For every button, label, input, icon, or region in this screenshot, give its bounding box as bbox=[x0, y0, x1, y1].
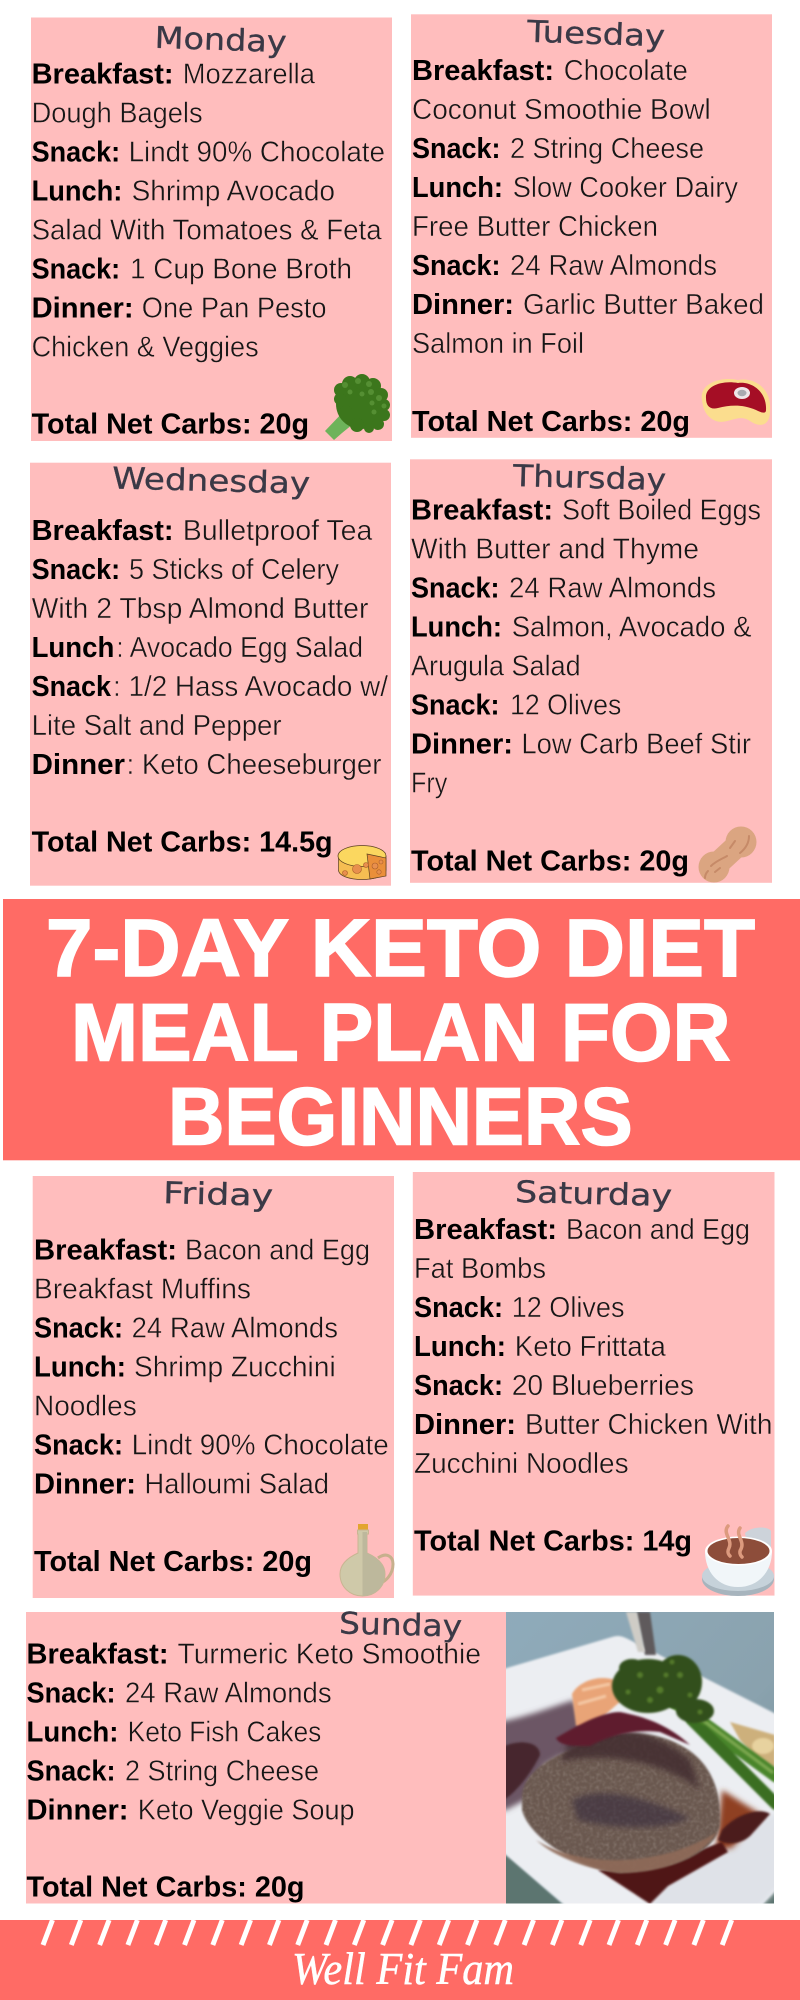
meals: Monday: Snack: bbox=[32, 253, 120, 285]
meals: Tuesday: Coconut Smoothie Bowl bbox=[412, 94, 711, 126]
meals: Thursday: Lunch: bbox=[411, 611, 502, 643]
meals: Tuesday: 2 String Cheese bbox=[510, 133, 704, 165]
meals: Tuesday: Lunch: bbox=[412, 172, 503, 204]
meals: Sunday: Keto Veggie Soup bbox=[138, 1794, 355, 1826]
meals: Monday: Lunch: bbox=[32, 175, 122, 207]
meals: Wednesday: Breakfast: bbox=[32, 515, 174, 547]
meals: Thursday: Soft Boiled Eggs bbox=[562, 494, 761, 526]
meals: Monday bbox=[32, 58, 385, 363]
right sauce bbox=[716, 1790, 762, 1850]
meals: Monday: 1 Cup Bone Broth bbox=[130, 253, 352, 285]
panel: Thursday bbox=[410, 459, 772, 883]
total net carbs: Wednesday: Total Net Carbs: 14.5g bbox=[32, 827, 333, 859]
meals: Friday: Lunch: bbox=[34, 1352, 126, 1384]
meals: Saturday: Butter Chicken With bbox=[525, 1409, 772, 1441]
meals: Wednesday: 5 Sticks of Celery bbox=[129, 554, 339, 586]
red onion bbox=[556, 1712, 690, 1746]
meals: Saturday: Fat Bombs bbox=[414, 1253, 546, 1285]
meals: Sunday bbox=[26, 1638, 481, 1826]
meals: Saturday: Dinner: bbox=[414, 1409, 516, 1441]
meals: Tuesday: Dinner: bbox=[412, 289, 514, 321]
meals: Friday: Breakfast: bbox=[34, 1234, 177, 1266]
meals: Sunday: Breakfast: bbox=[26, 1638, 168, 1670]
meals: Tuesday: Free Butter Chicken bbox=[412, 211, 658, 243]
title line 3: BEGINNERS bbox=[168, 1072, 633, 1163]
heading: Saturday: Saturday bbox=[515, 1175, 673, 1214]
meals: Wednesday: With 2 Tbsp Almond Butter bbox=[32, 593, 369, 625]
meals: Saturday: Breakfast: bbox=[414, 1214, 557, 1246]
panel: Saturday bbox=[413, 1172, 774, 1596]
meals: Saturday: Snack: bbox=[414, 1292, 503, 1324]
photo: steak with broccolini on a white plate bbox=[500, 1606, 780, 1910]
footer stripes bbox=[43, 1920, 732, 1945]
meals: Thursday: Salmon, Avocado & bbox=[512, 611, 752, 643]
total net carbs: Tuesday: Total Net Carbs: 20g bbox=[412, 406, 690, 438]
broccolini stems bbox=[660, 1698, 776, 1804]
icon: hot cocoa cup bbox=[702, 1526, 774, 1596]
meals: Sunday: 24 Raw Almonds bbox=[125, 1677, 332, 1709]
sweet potato mash bbox=[572, 1678, 622, 1728]
meals: Thursday: With Butter and Thyme bbox=[411, 533, 699, 565]
bone handle bbox=[636, 1612, 656, 1655]
meals: Friday: Noodles bbox=[34, 1390, 137, 1422]
meals: Wednesday: Snack: bbox=[32, 554, 120, 586]
meals: Wednesday: Dinner bbox=[32, 749, 125, 781]
heading: Sunday: Sunday bbox=[339, 1606, 463, 1645]
meals: Thursday: Low Carb Beef Stir bbox=[521, 728, 751, 760]
meals: Wednesday: Lite Salt and Pepper bbox=[32, 710, 282, 742]
heading: Thursday: Thursday bbox=[512, 459, 667, 498]
heading: Tuesday: Tuesday bbox=[525, 15, 666, 54]
meals: Sunday: Snack: bbox=[26, 1677, 116, 1709]
meals: Monday: Chicken & Veggies bbox=[32, 331, 259, 363]
icon: peanut bbox=[698, 826, 756, 882]
meals: Saturday: Zucchini Noodles bbox=[414, 1448, 629, 1480]
meals: Friday: Bacon and Egg bbox=[185, 1234, 370, 1266]
meals: Tuesday: Snack: bbox=[412, 250, 500, 282]
meals: Thursday: Arugula Salad bbox=[411, 650, 581, 682]
heading: Friday: Friday bbox=[163, 1176, 274, 1214]
meals: Friday: Shrimp Zucchini bbox=[134, 1352, 336, 1384]
meals: Monday: Lindt 90% Chocolate bbox=[129, 136, 385, 168]
title line 1: 7-DAY KETO DIET bbox=[46, 903, 755, 994]
meals: Friday: Snack: bbox=[34, 1312, 123, 1344]
meals: Tuesday: Garlic Butter Baked bbox=[523, 289, 764, 321]
broccolini florets bbox=[612, 1655, 714, 1723]
footer brand: Well Fit Fam bbox=[292, 1943, 514, 1994]
meals: Thursday: Snack: bbox=[411, 572, 500, 604]
icon: oil bottle bbox=[340, 1524, 393, 1596]
meals: Saturday: Keto Frittata bbox=[515, 1331, 667, 1363]
meals: Saturday: Snack: bbox=[414, 1370, 503, 1402]
meals: Wednesday: : Keto Cheeseburger bbox=[126, 749, 382, 781]
total net carbs: Thursday: Total Net Carbs: 20g bbox=[411, 846, 689, 878]
meals: Tuesday: Snack: bbox=[412, 133, 500, 165]
total net carbs: Friday: Total Net Carbs: 20g bbox=[34, 1546, 312, 1578]
meals: Saturday: 12 Olives bbox=[512, 1292, 624, 1324]
meals: Friday: 24 Raw Almonds bbox=[132, 1312, 338, 1344]
meals: Tuesday: 24 Raw Almonds bbox=[510, 250, 717, 282]
meals: Sunday: Snack: bbox=[26, 1755, 116, 1787]
icon: broccoli bbox=[325, 374, 390, 440]
meals: Thursday: Fry bbox=[411, 767, 448, 799]
steak bbox=[522, 1734, 720, 1873]
meals: Thursday: Dinner: bbox=[411, 728, 513, 760]
meals: Monday: Snack: bbox=[32, 136, 120, 168]
meals: Thursday bbox=[411, 494, 761, 799]
footer band bbox=[0, 1920, 800, 2000]
meals: Thursday: Breakfast: bbox=[411, 494, 553, 526]
meals: Thursday: 24 Raw Almonds bbox=[509, 572, 716, 604]
meals: Wednesday: : 1/2 Hass Avocado w/ bbox=[113, 671, 389, 703]
meals: Sunday: Dinner: bbox=[26, 1794, 128, 1826]
panel: Monday bbox=[31, 18, 392, 441]
meals: Saturday: Lunch: bbox=[414, 1331, 506, 1363]
meals: Friday: Lindt 90% Chocolate bbox=[132, 1430, 389, 1462]
bottom sauce bbox=[598, 1842, 728, 1904]
title banner bbox=[3, 899, 800, 1163]
meals: Thursday: 12 Olives bbox=[510, 689, 621, 721]
meals: Friday: Halloumi Salad bbox=[144, 1468, 329, 1500]
left sauce pool bbox=[506, 1696, 580, 1814]
heading: Monday: Monday bbox=[154, 21, 287, 60]
meals: Tuesday bbox=[412, 55, 764, 360]
meals: Wednesday: Snack bbox=[32, 671, 112, 703]
meals: Thursday: Snack: bbox=[411, 689, 500, 721]
meals: Sunday: 2 String Cheese bbox=[125, 1755, 319, 1787]
meals: Saturday: Bacon and Egg bbox=[566, 1214, 750, 1246]
panel: Sunday bbox=[26, 1606, 506, 1904]
meals: Friday: Snack: bbox=[34, 1430, 123, 1462]
meals: Tuesday: Breakfast: bbox=[412, 55, 554, 87]
meals: Monday: Mozzarella bbox=[183, 58, 316, 90]
meals: Tuesday: Slow Cooker Dairy bbox=[513, 172, 738, 204]
heading: Wednesday: Wednesday bbox=[112, 461, 311, 502]
meals: Monday: Shrimp Avocado bbox=[132, 175, 335, 207]
meals: Monday: Dinner: bbox=[32, 292, 134, 324]
meals: Sunday: Lunch: bbox=[26, 1716, 118, 1748]
total net carbs: Monday: Total Net Carbs: 20g bbox=[32, 408, 309, 440]
icon: cheese bbox=[338, 846, 386, 880]
meals: Sunday: Keto Fish Cakes bbox=[128, 1716, 321, 1748]
panel: Friday bbox=[33, 1176, 394, 1598]
total net carbs: Sunday: Total Net Carbs: 20g bbox=[26, 1872, 304, 1904]
meals: Wednesday: Lunch bbox=[32, 632, 114, 664]
meals: Monday: One Pan Pesto bbox=[142, 292, 326, 324]
panel: Wednesday bbox=[30, 461, 391, 886]
title line 2: MEAL PLAN FOR bbox=[71, 988, 731, 1079]
meals: Saturday bbox=[414, 1214, 772, 1480]
meals: Monday: Dough Bagels bbox=[32, 97, 203, 129]
meals: Tuesday: Chocolate bbox=[564, 55, 688, 87]
meals: Sunday: Turmeric Keto Smoothie bbox=[178, 1638, 481, 1670]
meals: Wednesday bbox=[32, 515, 389, 781]
total net carbs: Saturday: Total Net Carbs: 14g bbox=[414, 1526, 692, 1558]
meals: Tuesday: Salmon in Foil bbox=[412, 328, 584, 360]
meals: Wednesday: : Avocado Egg Salad bbox=[116, 632, 363, 664]
meals: Monday: Breakfast: bbox=[32, 58, 174, 90]
plate bbox=[500, 1636, 780, 1910]
meals: Monday: Salad With Tomatoes & Feta bbox=[32, 214, 382, 246]
meals: Wednesday: Bulletproof Tea bbox=[183, 515, 373, 547]
meals: Friday bbox=[34, 1234, 389, 1500]
panel: Tuesday bbox=[411, 14, 772, 438]
sliced potatoes bbox=[730, 1722, 775, 1768]
meals: Saturday: 20 Blueberries bbox=[512, 1370, 694, 1402]
icon: steak bbox=[702, 379, 770, 425]
meals: Friday: Dinner: bbox=[34, 1468, 136, 1500]
meals: Friday: Breakfast Muffins bbox=[34, 1274, 251, 1306]
